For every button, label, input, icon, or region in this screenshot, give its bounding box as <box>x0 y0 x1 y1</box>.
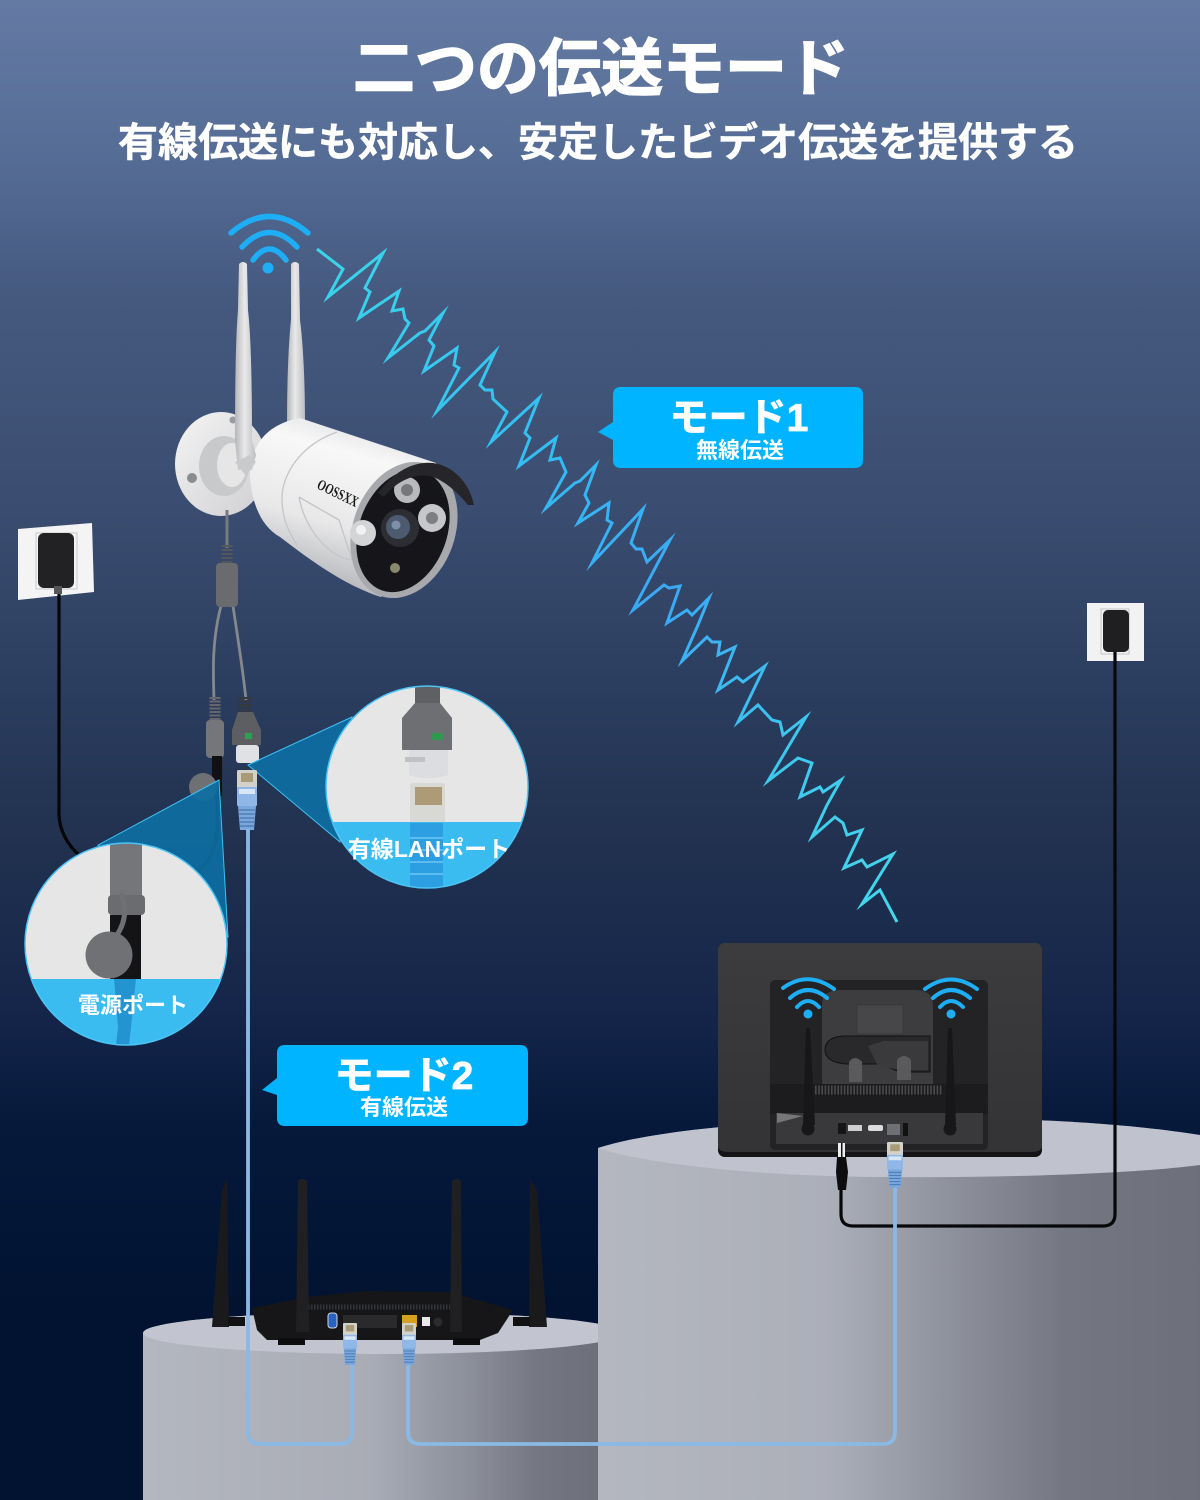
icon: monitor wifi left <box>783 979 834 1018</box>
label plate <box>857 1005 903 1034</box>
label: 有線LANポート <box>348 836 510 862</box>
lens <box>381 509 419 547</box>
blue cable <box>114 979 136 1046</box>
RJ45 plug: router left <box>343 1323 357 1365</box>
wall mount <box>175 412 267 516</box>
mode 1 badge <box>598 387 863 468</box>
title: 二つの伝送モード <box>353 35 849 104</box>
RJ45 plug: monitor <box>887 1142 903 1188</box>
feet <box>278 1338 480 1345</box>
LAN cable: camera to router <box>248 829 352 1444</box>
left power cord <box>59 594 80 856</box>
subtitle: 有線伝送にも対応し、安定したビデオ伝送を提供する <box>118 120 1078 165</box>
router <box>212 1179 547 1345</box>
icon: monitor wifi right <box>925 980 977 1018</box>
RJ45 plug: router right <box>402 1323 416 1365</box>
port panel <box>776 1113 983 1144</box>
wireless signal wave <box>317 249 897 922</box>
connector detail <box>86 841 145 983</box>
callout: power port <box>20 841 235 1049</box>
RJ45 plug: camera side <box>237 770 257 830</box>
label: 電源ポート <box>78 993 188 1018</box>
DC plug <box>836 1143 848 1190</box>
LEDs <box>350 477 446 573</box>
mode 1 badge: 無線伝送 <box>696 438 784 463</box>
icon: camera wifi <box>231 216 308 274</box>
mode 2 badge: 有線伝送 <box>360 1095 448 1120</box>
callout: LAN port <box>320 684 535 892</box>
vent <box>308 1304 450 1310</box>
vent band <box>770 1084 988 1114</box>
brand: OOSSXX <box>314 477 361 511</box>
outer back shell <box>718 943 1042 1157</box>
stand legs <box>849 1056 911 1082</box>
stand block <box>822 990 933 1085</box>
antenna back <box>287 262 305 425</box>
inner antennas <box>296 1179 462 1332</box>
body seam and panel <box>282 432 352 560</box>
mode 2 badge <box>262 1045 528 1126</box>
left wall socket and adapter <box>18 523 94 600</box>
hood <box>378 463 474 505</box>
power connector <box>189 697 224 872</box>
LAN cable: router to monitor <box>408 1185 895 1444</box>
label band <box>333 822 521 886</box>
monitor <box>718 943 1042 1157</box>
pigtail cable <box>213 510 246 700</box>
label band <box>32 979 220 1044</box>
camera <box>175 262 476 613</box>
pedestal: right cylinder <box>598 1118 1200 1500</box>
camera body <box>250 418 457 597</box>
LAN connector <box>232 697 261 763</box>
callout cone: LAN port <box>248 717 352 842</box>
handle <box>825 1036 930 1072</box>
RJ45 detail <box>410 783 445 825</box>
mode 2 badge: モード2 <box>335 1055 473 1098</box>
outer antennas <box>212 1179 547 1327</box>
recessed panel <box>770 980 988 1150</box>
mode 1 badge: モード1 <box>670 397 808 440</box>
antenna front <box>235 262 256 476</box>
right power cord <box>841 652 1115 1226</box>
right wall socket and adapter <box>1087 603 1144 661</box>
router body <box>252 1291 513 1340</box>
pedestal: left cylinder <box>143 1312 623 1500</box>
blue boot <box>410 823 443 888</box>
camera front ring <box>332 447 476 613</box>
callout cone: power port <box>98 780 228 937</box>
router ports <box>328 1313 442 1328</box>
monitor antennas <box>802 1028 956 1136</box>
plug head <box>402 684 452 778</box>
